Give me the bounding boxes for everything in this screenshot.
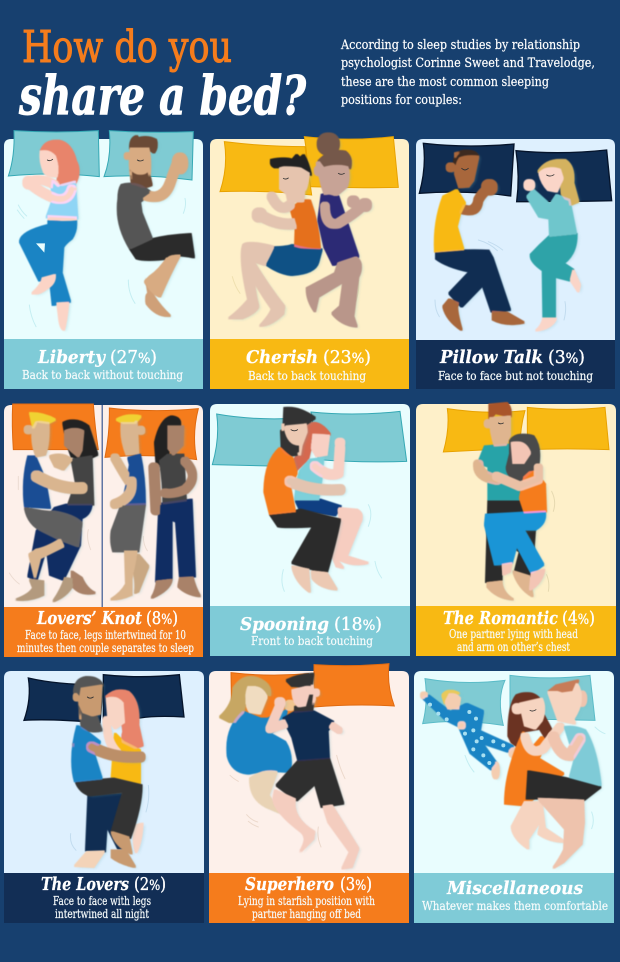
man bbox=[527, 680, 601, 868]
caption bbox=[4, 339, 203, 389]
intertwined couple bbox=[16, 413, 97, 601]
caption: One partner lying with head bbox=[449, 627, 578, 641]
intro text: positions for couples: bbox=[341, 93, 462, 108]
panel: liberty bbox=[4, 131, 203, 389]
man bbox=[118, 136, 194, 316]
caption: Face to face with legs bbox=[53, 894, 151, 908]
card background bbox=[210, 404, 410, 656]
pillows bbox=[8, 131, 193, 180]
illustration: head on chest bbox=[443, 403, 609, 600]
caption: Front to back touching bbox=[251, 634, 373, 648]
card background bbox=[416, 139, 615, 389]
caption: partner hanging off bed bbox=[252, 907, 361, 921]
illustration: intertwined then separated bbox=[9, 404, 200, 607]
man bbox=[264, 408, 340, 592]
caption: Pillow Talk bbox=[439, 347, 543, 368]
illustration: starfish position bbox=[220, 664, 394, 869]
caption bbox=[416, 340, 615, 389]
pillows bbox=[443, 407, 609, 452]
caption: Back to back touching bbox=[248, 369, 366, 383]
card background bbox=[4, 671, 204, 923]
man bbox=[229, 155, 322, 326]
caption: Face to face but not touching bbox=[438, 369, 593, 383]
pillows bbox=[212, 411, 407, 466]
caption: Miscellaneous bbox=[446, 878, 583, 899]
caption: The Romantic bbox=[443, 608, 558, 629]
caption bbox=[4, 873, 204, 923]
caption: (3%) bbox=[548, 347, 585, 368]
caption: (18%) bbox=[334, 614, 382, 635]
caption: Lovers’ Knot bbox=[36, 608, 143, 629]
caption: and arm on other’s chest bbox=[457, 640, 570, 654]
woman bbox=[86, 690, 143, 853]
caption: (2%) bbox=[134, 874, 166, 895]
pillows bbox=[12, 404, 198, 460]
illustration: couple back to back bbox=[8, 131, 194, 330]
man bbox=[72, 677, 142, 867]
card background bbox=[414, 671, 614, 923]
panel: miscellaneous bbox=[414, 671, 614, 923]
card background bbox=[209, 671, 409, 923]
woman bbox=[20, 141, 79, 330]
caption: Liberty bbox=[37, 347, 106, 368]
panel: the romantic bbox=[416, 403, 616, 656]
woman bbox=[307, 133, 371, 327]
card background bbox=[416, 404, 616, 656]
panel: cherish bbox=[210, 133, 409, 389]
child in pyjamas bbox=[421, 691, 519, 778]
caption: Lying in starfish position with bbox=[238, 894, 375, 908]
caption: (8%) bbox=[146, 608, 178, 629]
illustration: couple and child bbox=[421, 675, 605, 868]
panel: spooning bbox=[210, 404, 410, 656]
man bbox=[478, 403, 535, 600]
caption: The Lovers bbox=[41, 874, 129, 895]
caption: (23%) bbox=[323, 347, 371, 368]
illustration: legs intertwined bbox=[24, 675, 184, 867]
caption: (27%) bbox=[110, 347, 157, 368]
card background bbox=[4, 139, 203, 389]
intro text bbox=[340, 38, 595, 108]
title: share a bed? bbox=[18, 65, 307, 127]
card background bbox=[210, 139, 409, 389]
intro text: According to sleep studies by relationship bbox=[340, 38, 580, 53]
title: How do you bbox=[22, 22, 232, 73]
panel: pillow talk bbox=[416, 139, 615, 389]
pillows bbox=[423, 675, 595, 725]
panel: lovers' knot bbox=[4, 404, 203, 657]
caption bbox=[416, 606, 616, 656]
caption bbox=[210, 606, 410, 656]
woman bbox=[485, 435, 546, 590]
woman bbox=[220, 677, 295, 813]
illustration: couple face to face bbox=[419, 143, 612, 331]
man bbox=[270, 674, 358, 869]
caption: (3%) bbox=[340, 874, 372, 895]
pillows bbox=[419, 143, 612, 202]
caption: Face to face, legs intertwined for 10 bbox=[25, 628, 186, 642]
man bbox=[435, 151, 524, 330]
title bbox=[18, 22, 307, 127]
panel: the lovers bbox=[4, 671, 204, 923]
caption: Cherish bbox=[246, 347, 318, 368]
pillows bbox=[24, 675, 184, 723]
woman bbox=[292, 423, 368, 568]
caption bbox=[414, 873, 614, 923]
pillows bbox=[220, 137, 398, 195]
panel: superhero bbox=[209, 664, 409, 923]
pillows bbox=[231, 664, 394, 720]
woman bbox=[524, 160, 580, 331]
separated couple bbox=[111, 415, 200, 600]
caption: intertwined all night bbox=[55, 907, 149, 921]
caption: minutes then couple separates to sleep bbox=[17, 641, 194, 655]
caption bbox=[210, 339, 409, 389]
woman bbox=[505, 693, 565, 849]
intro text: these are the most common sleeping bbox=[341, 75, 549, 90]
illustration: couple back to back touching bbox=[220, 133, 398, 327]
illustration: front to back bbox=[212, 408, 407, 592]
caption: Superhero bbox=[245, 874, 334, 895]
caption: Spooning bbox=[240, 614, 329, 635]
caption: Back to back without touching bbox=[22, 368, 183, 382]
caption bbox=[4, 607, 203, 657]
card background bbox=[4, 405, 203, 657]
caption bbox=[209, 873, 409, 923]
caption: (4%) bbox=[562, 608, 595, 629]
